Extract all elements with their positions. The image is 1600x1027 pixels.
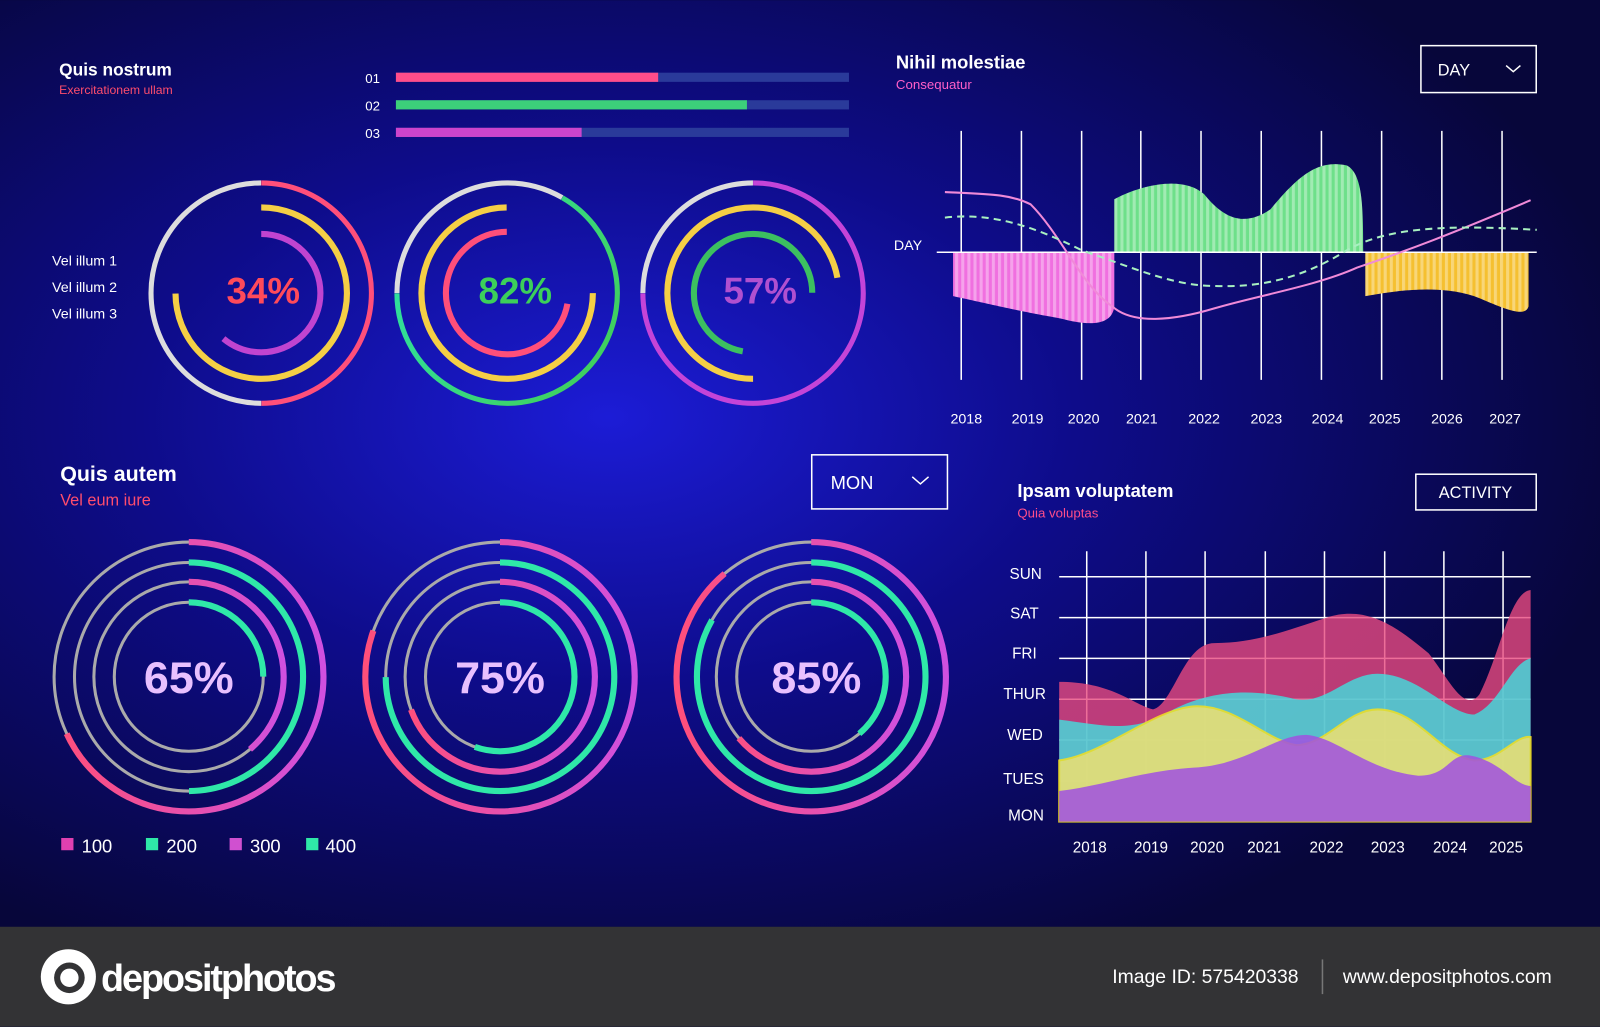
title: Quis autem: [60, 462, 177, 509]
donut 34%: 34%: [227, 270, 300, 311]
title: Quis nostrum: Quis nostrum: [59, 60, 172, 80]
title: Quis autem: Quis autem: [60, 462, 177, 486]
legend labels: Vel illum: Vel illum 2: [52, 280, 117, 296]
chart: day timeline: 2021: [1126, 412, 1158, 428]
chart: weekly activity area: SUN: [1010, 566, 1042, 583]
ring chart 75%: [365, 542, 635, 811]
title: Ipsam voluptatem: Ipsam voluptatem: [1017, 480, 1173, 501]
bar list: 02: [365, 98, 380, 113]
button: ACTIVITY: [1416, 474, 1536, 510]
chart: day timeline: DAY: [894, 238, 923, 254]
chart: weekly activity area: MON: [1008, 808, 1044, 825]
chart: day timeline: 2019: [1012, 412, 1043, 428]
legend: values: [61, 835, 356, 856]
legend labels: Vel illum: Vel illum 3: [52, 307, 117, 323]
footer bar: www.depositphotos.com: [1342, 966, 1552, 988]
ring chart 65%: [54, 542, 323, 811]
legend: values: 300: [250, 835, 281, 856]
chart: weekly activity area: 2024: [1433, 839, 1468, 856]
dropdown: MON: MON: [831, 472, 873, 493]
legend labels: Vel illum: [52, 254, 117, 323]
chart: weekly activity area: 2023: [1371, 839, 1405, 856]
chart: weekly activity area: 2025: [1489, 839, 1523, 856]
title: Quis nostrum: [59, 60, 173, 97]
chart: day timeline: 2024: [1312, 412, 1343, 428]
legend: values: 200: [166, 835, 197, 856]
chart: weekly activity area: 2018: [1073, 839, 1107, 856]
ring chart 75%: 75%: [455, 652, 545, 703]
chart: day timeline: [894, 131, 1537, 428]
title: Nihil molestiae: Consequatur: [896, 77, 972, 92]
chart: day timeline: 2026: [1431, 412, 1463, 428]
chart: weekly activity area: FRI: [1012, 645, 1037, 662]
dropdown: MON: [812, 455, 947, 509]
chart: day timeline: 2020: [1068, 412, 1100, 428]
chart: weekly activity area: WED: [1007, 727, 1043, 744]
chart: weekly activity area: THUR: [1003, 686, 1046, 703]
bar list: [365, 71, 849, 141]
donut 34%: [151, 183, 371, 403]
chart: weekly activity area: [1003, 551, 1531, 856]
title: Ipsam voluptatem: [1017, 480, 1173, 521]
title: Nihil molestiae: Nihil molestiae: [896, 52, 1025, 73]
footer bar: Image ID: 575420338: [1112, 966, 1299, 988]
title: Nihil molestiae: [896, 52, 1025, 92]
chart: weekly activity area: 2019: [1134, 839, 1168, 856]
ring chart 65%: 65%: [144, 652, 234, 703]
bar list: 01: [365, 71, 380, 86]
icon: camera logo: [41, 949, 96, 1004]
chart: weekly activity area: 2021: [1247, 839, 1281, 856]
chart: day timeline: 2018: [950, 412, 982, 428]
chart: weekly activity area: SAT: [1010, 606, 1039, 623]
ring chart 85%: [677, 542, 946, 811]
chart: day timeline: 2022: [1188, 412, 1220, 428]
legend labels: Vel illum: Vel illum 1: [52, 254, 117, 270]
chart: day timeline: 2025: [1369, 412, 1401, 428]
bar list: 03: [365, 126, 380, 141]
ring chart 85%: 85%: [771, 652, 861, 703]
donut 82%: [357, 143, 658, 444]
title: Quis autem: Vel eum iure: [60, 491, 151, 509]
donut 57%: 57%: [723, 270, 797, 311]
footer bar: [0, 927, 1600, 1027]
button: ACTIVITY: ACTIVITY: [1439, 484, 1512, 502]
legend: values: 400: [326, 835, 356, 856]
chart: day timeline: 2023: [1250, 412, 1282, 428]
chart: day timeline: 2027: [1489, 412, 1521, 428]
donut 82%: 82%: [479, 270, 552, 311]
chart: weekly activity area: 2022: [1310, 839, 1344, 856]
footer bar: depositphotos: [101, 957, 336, 999]
chart: weekly activity area: TUES: [1003, 771, 1044, 788]
legend: values: 100: [82, 835, 112, 856]
title: Ipsam voluptatem: Quia voluptas: [1017, 506, 1099, 521]
dropdown: DAY: [1421, 46, 1536, 93]
dropdown: DAY: DAY: [1438, 62, 1470, 80]
donut 57%: [643, 183, 863, 403]
title: Quis nostrum: Exercitationem ullam: [59, 83, 173, 97]
chart: weekly activity area: 2020: [1190, 839, 1224, 856]
